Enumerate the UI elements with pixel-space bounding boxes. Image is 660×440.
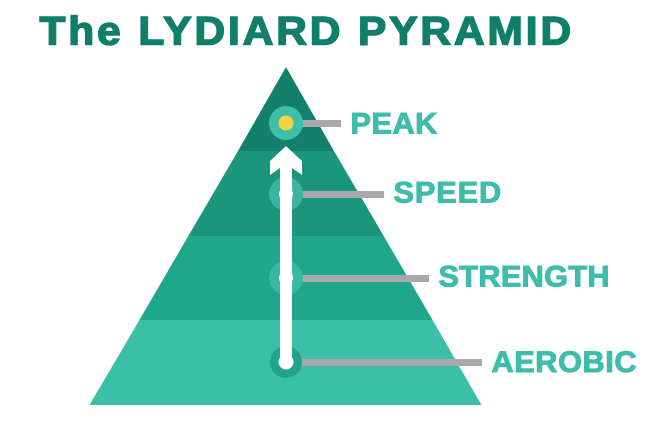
tier: peak (238, 67, 334, 151)
tier: aerobic (90, 320, 482, 405)
arrow (270, 146, 302, 370)
marker: speed (269, 177, 303, 211)
label: aerobic: AEROBIC (492, 347, 637, 379)
label: peak: PEAK (350, 108, 438, 140)
tier: strength (139, 236, 433, 320)
connector bars (302, 120, 482, 366)
title: The LYDIARD PYRAMID (40, 9, 571, 53)
label: speed: SPEED (394, 177, 501, 209)
marker: strength (269, 261, 303, 295)
label: strength: STRENGTH (438, 261, 610, 293)
marker: aerobic (270, 346, 302, 378)
pyramid (90, 67, 482, 405)
marker: peak (269, 106, 303, 140)
tier: speed (188, 151, 384, 236)
